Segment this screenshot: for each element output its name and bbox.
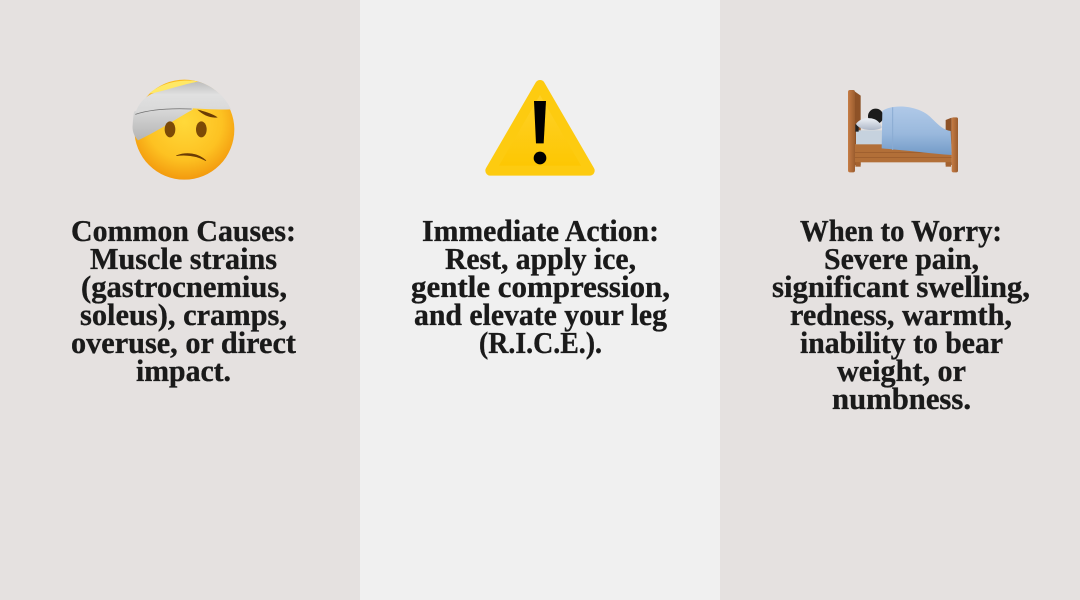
panel: immediate action bbox=[360, 0, 720, 600]
panel: when to worry bbox=[720, 0, 1080, 600]
text: when to worry: inability to bear bbox=[800, 326, 1003, 360]
text: common causes bbox=[71, 214, 297, 388]
text: common causes: (gastrocnemius, bbox=[81, 270, 287, 304]
text: when to worry: weight, or bbox=[837, 354, 966, 388]
text: when to worry: numbness. bbox=[832, 382, 971, 416]
icon: person in bed bbox=[848, 90, 958, 172]
icon: face with head bandage bbox=[133, 80, 234, 180]
icon: warning sign bbox=[490, 85, 590, 171]
text: immediate action: and elevate your leg bbox=[414, 298, 667, 332]
text: common causes: Muscle strains bbox=[90, 242, 277, 276]
text: common causes: soleus), cramps, bbox=[80, 298, 287, 332]
text: common causes: impact. bbox=[136, 354, 231, 388]
text: when to worry: redness, warmth, bbox=[790, 298, 1012, 332]
text: immediate action: Rest, apply ice, bbox=[445, 242, 636, 276]
text: when to worry: When to Worry: bbox=[800, 214, 1002, 248]
text: when to worry: significant swelling, bbox=[772, 270, 1030, 304]
text: immediate action: Immediate Action: bbox=[422, 214, 659, 248]
text: immediate action: gentle compression, bbox=[411, 270, 670, 304]
text: immediate action bbox=[411, 214, 670, 360]
text: when to worry: Severe pain, bbox=[824, 242, 979, 276]
text: when to worry bbox=[772, 214, 1030, 416]
text: common causes: overuse, or direct bbox=[71, 326, 297, 360]
panel: common causes bbox=[0, 0, 360, 600]
text: immediate action: (R.I.C.E.). bbox=[479, 326, 602, 360]
text: common causes: Common Causes: bbox=[71, 214, 296, 248]
